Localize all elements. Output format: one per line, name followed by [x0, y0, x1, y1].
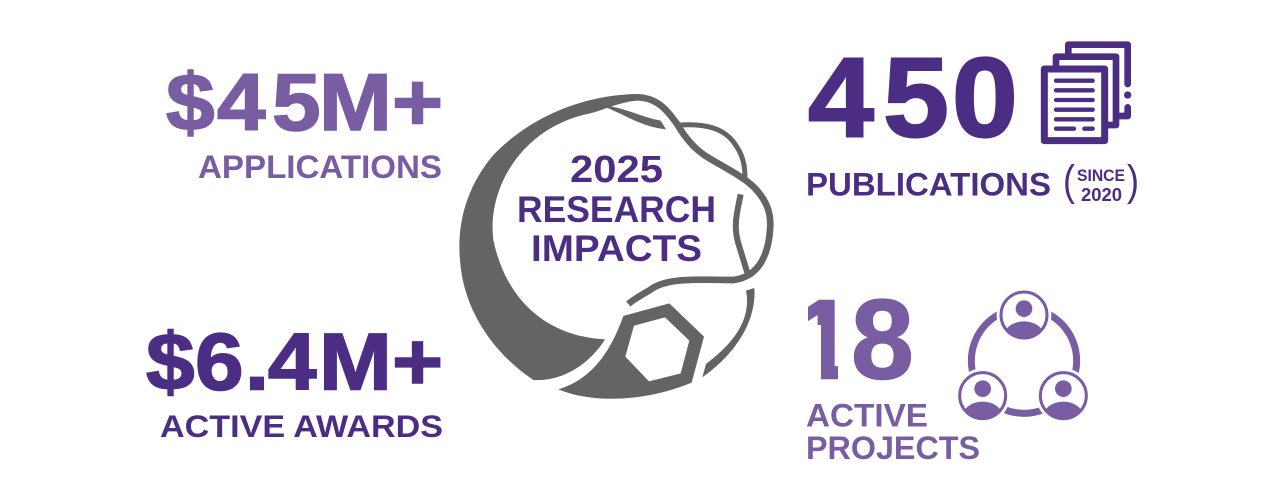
stat: publications [806, 34, 1139, 205]
since 2020 note: ( [1063, 157, 1076, 205]
active awards amount: $6.4M+ [146, 316, 443, 407]
stat: applications [166, 57, 443, 185]
central logo badge [459, 94, 770, 399]
logo title: IMPACTS [531, 228, 702, 269]
projects label: ACTIVE [806, 398, 928, 434]
since 2020 note: SINCE [1077, 166, 1125, 185]
since 2020 note: ) [1127, 157, 1139, 205]
projects count: 18 [792, 276, 914, 402]
logo title [517, 149, 716, 269]
logo title: 2025 [570, 149, 663, 191]
applications label: APPLICATIONS [198, 149, 442, 185]
since 2020 note: 2020 [1081, 185, 1122, 205]
logo graphic [459, 94, 770, 399]
stat: active projects [806, 290, 1088, 460]
stat: active awards [146, 316, 443, 444]
applications amount: $45M+ [166, 57, 443, 147]
since 2020 note [1063, 157, 1139, 205]
icon: connected people network [958, 290, 1088, 420]
publications count: 450 [808, 34, 1018, 161]
logo title: RESEARCH [517, 189, 716, 230]
icon: stacked documents [1044, 45, 1131, 141]
publications label: PUBLICATIONS [806, 166, 1051, 202]
active awards label: ACTIVE AWARDS [160, 408, 443, 444]
stat: active projects: PROJECTS [806, 430, 980, 466]
